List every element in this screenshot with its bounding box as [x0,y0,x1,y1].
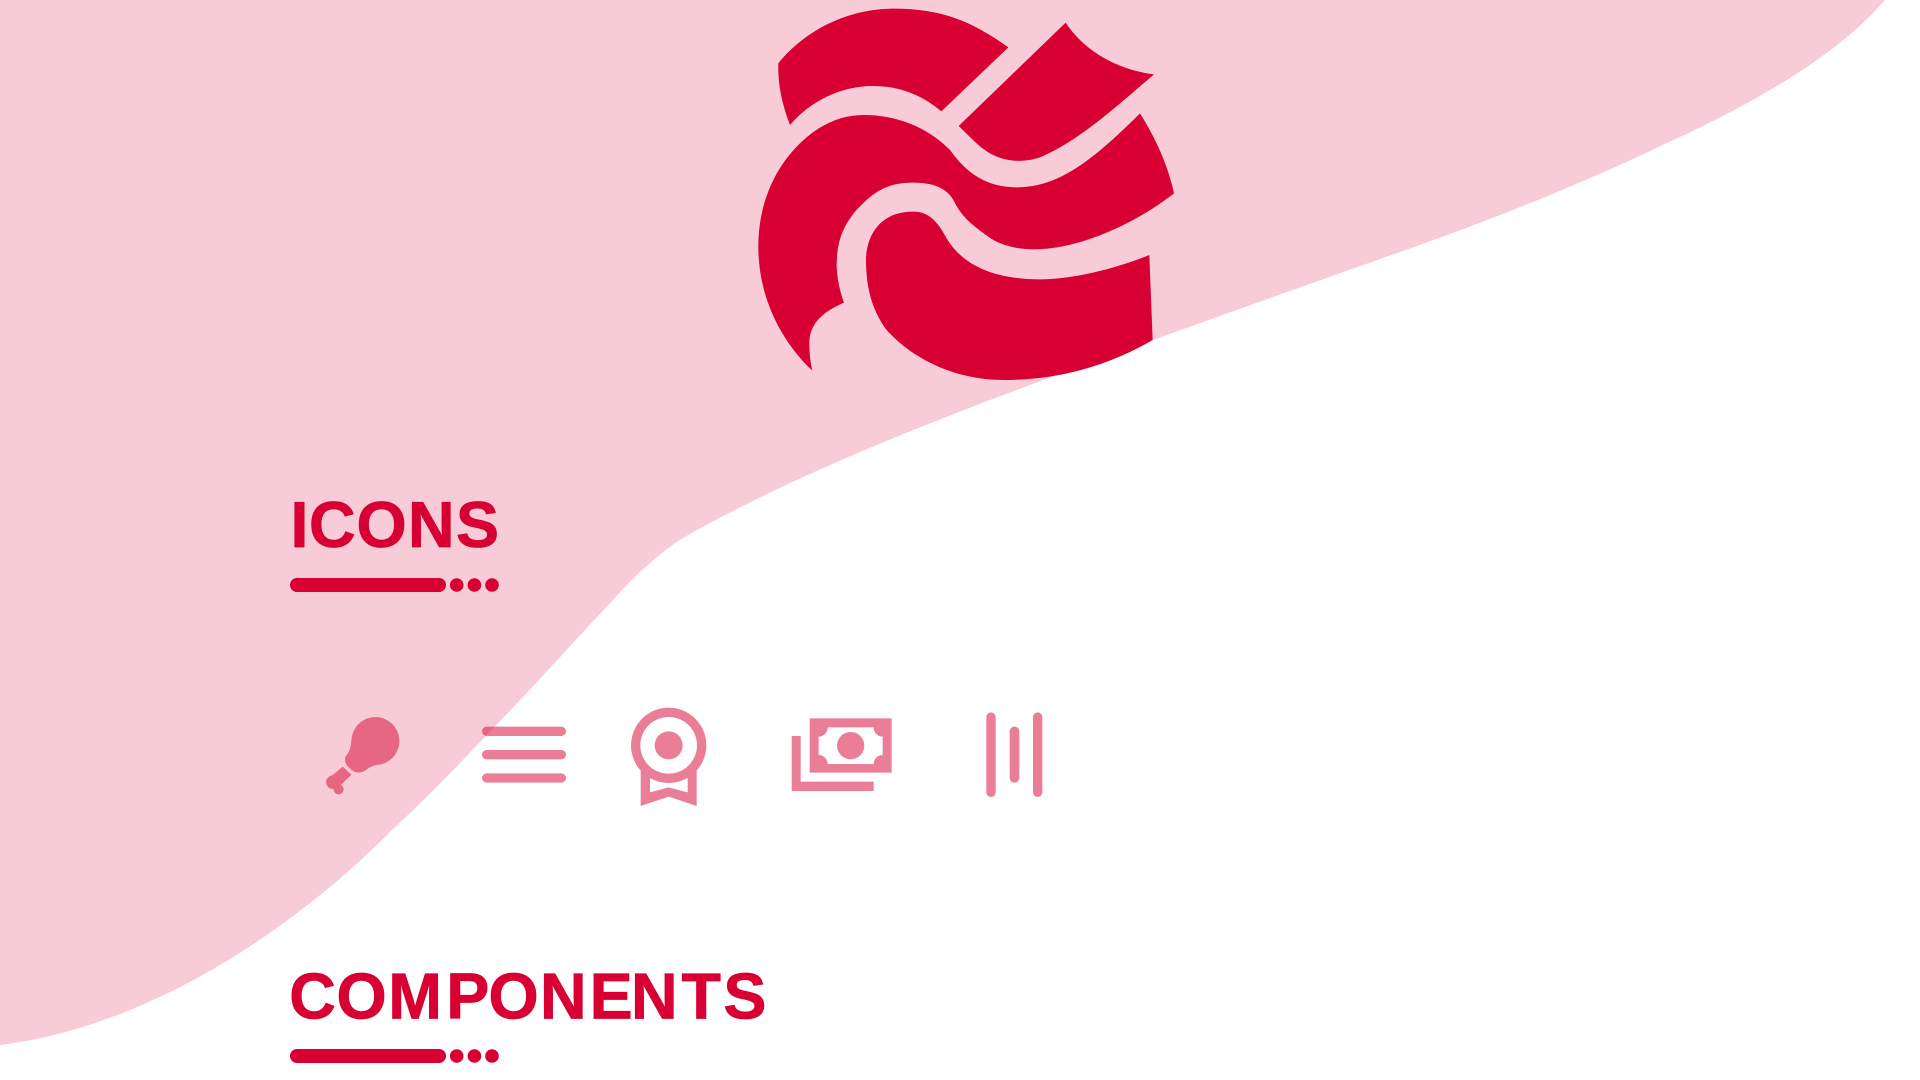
section heading: components [289,961,766,1063]
icon: chicken drumstick [326,717,399,794]
icon: vertical bars [986,712,1042,797]
section heading: icons [290,489,499,592]
logo piece: main swirl [758,113,1174,371]
heading text: ICONS: ICONS [290,489,499,561]
logo piece: lower swirl [866,212,1153,380]
logo piece: upper right leaf [959,23,1154,161]
icon: award medal [631,708,706,806]
logo: red swirl mark [758,9,1174,380]
icon: stacked banknotes [792,718,892,791]
icon: hamburger menu [482,727,566,783]
heading underline: bar and three dots [290,578,499,592]
heading text: COMPONENTS: COMPONENTS [289,961,766,1033]
logo piece: top arc [778,9,1008,125]
heading underline: bar and three dots [290,1049,499,1063]
